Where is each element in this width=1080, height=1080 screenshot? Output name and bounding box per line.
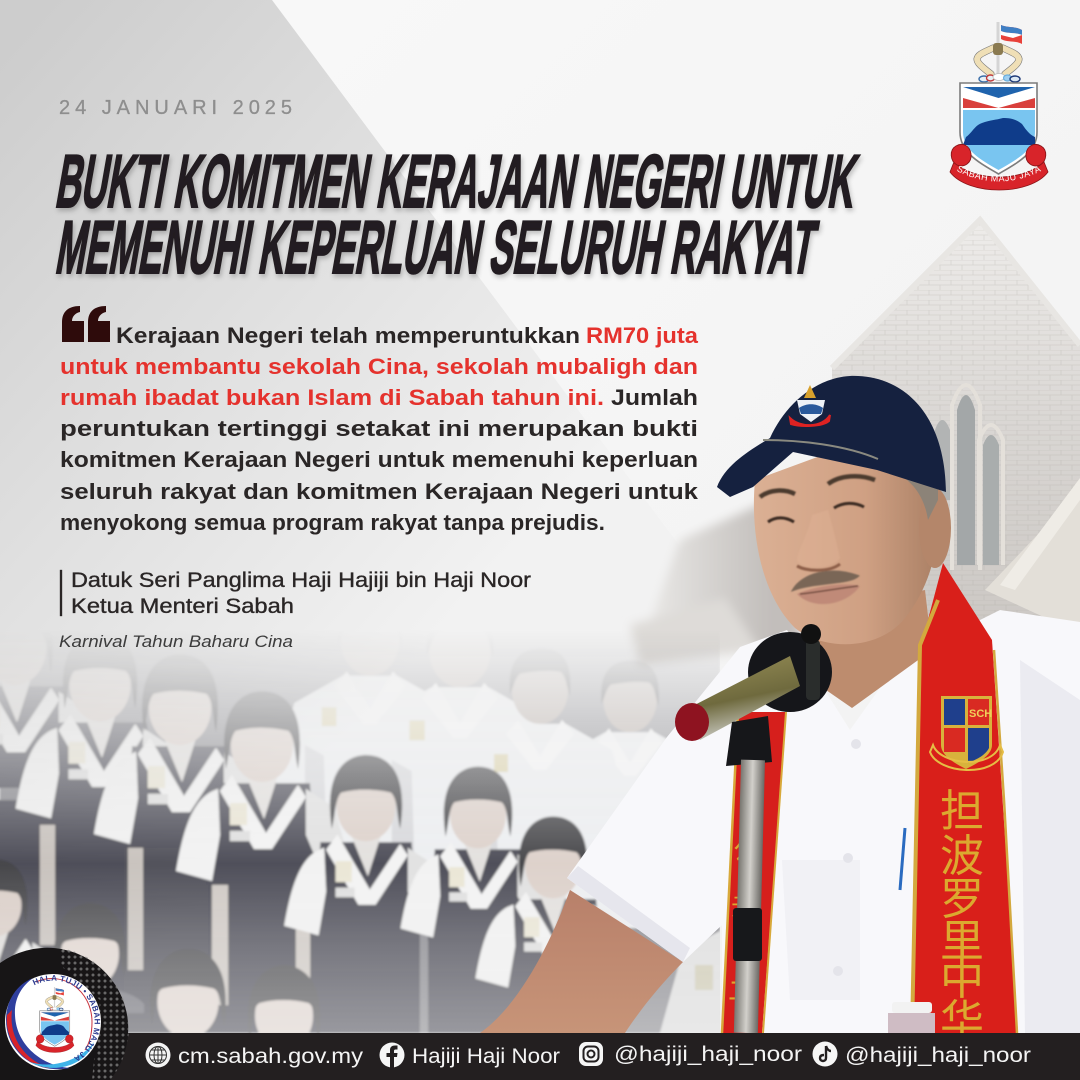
badge crest [36, 987, 74, 1052]
shirt shading [567, 660, 1080, 1033]
quote text block [60, 323, 699, 535]
quote text block: untuk membantu sekolah Cina, sekolah mubaligh dan [60, 354, 698, 379]
sash Chinese characters: 中 [940, 955, 984, 1004]
attribution: Datuk Seri Panglima Haji Hajiji bin Haji Noor [71, 569, 531, 592]
motto text: SABAH MAJU JAYA [957, 166, 1042, 182]
sash Chinese characters: 担 [940, 787, 984, 836]
sash Chinese characters: 罗 [940, 875, 984, 924]
icon: tiktok [812, 1042, 838, 1066]
quote text block: seluruh rakyat dan komitmen Kerajaan Negeri untuk [60, 479, 699, 504]
attribution [60, 569, 531, 618]
sash Chinese characters: 波 [940, 832, 984, 881]
shirt buttons and pen [833, 739, 905, 976]
instagram handle: @hajiji_haji_noor [614, 1043, 802, 1066]
icon: opening quotation mark [62, 306, 110, 342]
right sash with crest and Chinese text [912, 563, 1018, 1046]
quote text block: Jumlah [611, 385, 698, 410]
icon: globe [146, 1042, 170, 1068]
attribution: Ketua Menteri Sabah [71, 595, 294, 618]
title [51, 141, 864, 290]
quote text block: peruntukan tertinggi setakat ini merupakan bukti [60, 416, 698, 441]
sash school crest [930, 696, 1003, 770]
quote text block: menyokong semua program rakyat tanpa prejudis. [60, 510, 605, 535]
left sash strip [722, 712, 786, 1033]
quote text block: Kerajaan Negeri telah memperuntukkan [116, 323, 580, 348]
event name: Karnival Tahun Baharu Cina [59, 632, 293, 651]
cap badge [790, 385, 830, 426]
background photo: lower building wing [630, 500, 800, 665]
footer bar [0, 1033, 1080, 1080]
sash school crest: SCH [969, 708, 992, 720]
website text: cm.sabah.gov.my [178, 1045, 364, 1068]
logo: Sabah coat of arms [950, 22, 1048, 190]
quote text block: komitmen Kerajaan Negeri untuk memenuhi keperluan [60, 447, 698, 472]
icon: instagram [579, 1042, 603, 1066]
portrait: speaker with sash [480, 376, 1080, 1046]
left sash strip: 二 [728, 976, 754, 1006]
neck [800, 590, 932, 708]
sash Chinese characters: 华 [940, 997, 984, 1046]
microphone on stand [675, 624, 832, 1033]
white shirt [567, 610, 1080, 1033]
left sash strip: 元 [731, 894, 755, 921]
badge: Hala Tuju Sabah Maju Jaya [0, 948, 129, 1080]
arm [480, 890, 683, 1033]
background photo: church building [832, 220, 1080, 660]
water bottle [888, 1002, 935, 1033]
navy cap [717, 376, 946, 497]
face [754, 445, 951, 644]
facebook name: Hajiji Haji Noor [412, 1045, 560, 1068]
sash Chinese characters: 里 [940, 917, 984, 966]
date: 24 JANUARI 2025 [59, 97, 292, 119]
background photo: schoolchildren [0, 643, 720, 1033]
sash Chinese characters [940, 787, 984, 1046]
left sash strip: 公 [733, 835, 761, 866]
quote text block: rumah ibadat bukan Islam di Sabah tahun ini. [60, 385, 604, 410]
quote text block: RM70 juta [586, 323, 699, 348]
tiktok handle: @hajiji_haji_noor [845, 1044, 1031, 1067]
icon: facebook [380, 1042, 404, 1068]
